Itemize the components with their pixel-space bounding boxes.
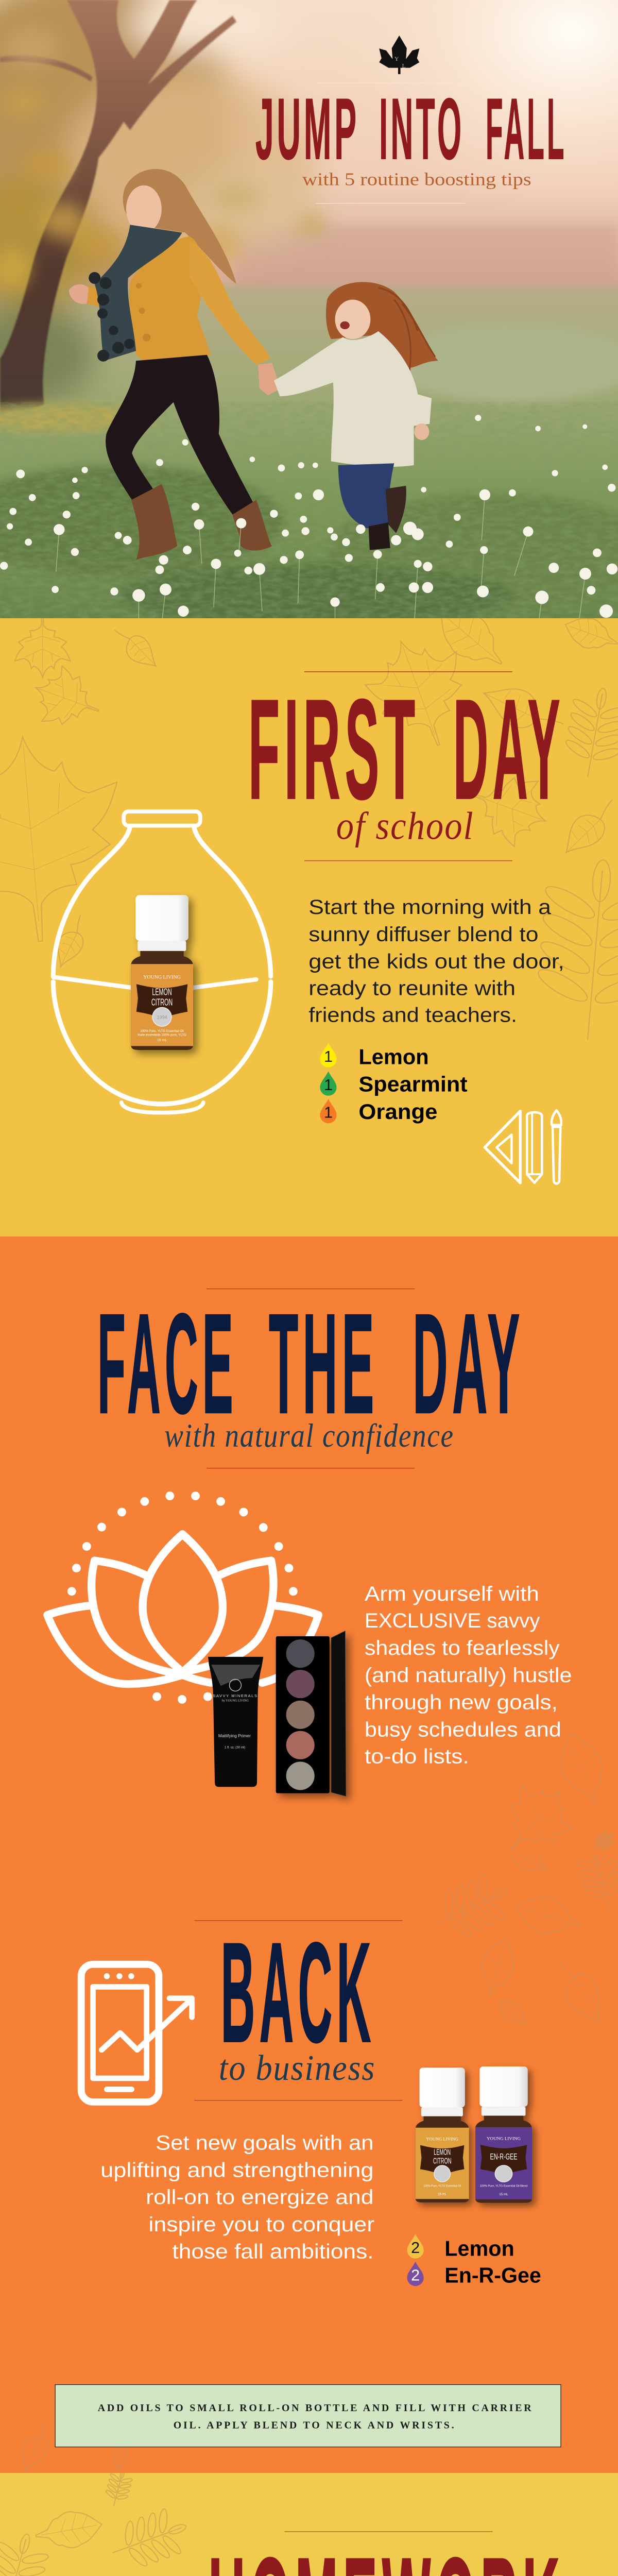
body text: inspire you to conquer <box>149 2213 374 2236</box>
icon: lotus <box>47 1492 318 1704</box>
mother <box>69 169 281 560</box>
body text: Set new goals with an <box>156 2131 374 2154</box>
dandelion stems <box>56 495 585 618</box>
product: lemon bottle: LEMON <box>434 2148 451 2157</box>
icon: diffuser outline <box>53 811 271 1113</box>
oil list: 1 <box>324 1048 333 1065</box>
body text: shades to fearlessly <box>365 1637 560 1659</box>
product: primer tube: 1 fl. oz. (30 ml) <box>225 1745 245 1749</box>
product: en-r-gee bottle: YOUNG LIVING <box>487 2136 521 2141</box>
oil list: Lemon <box>358 1045 429 1069</box>
oil list <box>407 2234 541 2287</box>
oil list: Spearmint <box>358 1072 468 1096</box>
oil list: 1 <box>324 1104 333 1122</box>
leaf pattern background <box>0 2467 194 2576</box>
hero photo: mother and daughter running through a field <box>0 0 618 618</box>
heading: THE <box>269 1284 379 1443</box>
oil list: Orange <box>358 1100 437 1124</box>
body text: to-do lists. <box>365 1745 469 1768</box>
panel: first day of school <box>0 618 618 1236</box>
panel: face the day <box>0 1236 618 1855</box>
leaf pattern background <box>0 596 618 1045</box>
product: lemon bottle: LEMON <box>152 987 172 997</box>
body text: friends and teachers. <box>308 1004 517 1027</box>
body text <box>365 1583 572 1768</box>
tree trunk and branches <box>0 0 236 414</box>
body text: EXCLUSIVE savvy <box>365 1609 540 1632</box>
body text: (and naturally) hustle <box>365 1664 572 1687</box>
sun glow <box>327 0 618 221</box>
product: en-r-gee bottle: EN-R-GEE <box>490 2153 517 2161</box>
product: lemon bottle <box>131 895 193 1050</box>
product: lemon bottle: 15 mL <box>157 1039 167 1042</box>
grass patches <box>0 324 618 627</box>
product: lemon bottle <box>416 2067 469 2202</box>
panel: back to business <box>0 1855 618 2473</box>
product: en-r-gee bottle: 15 mL <box>499 2193 508 2196</box>
grass texture <box>0 402 618 618</box>
product: en-r-gee bottle <box>475 2066 532 2203</box>
body text: sunny diffuser blend to <box>308 923 538 946</box>
oil list: Lemon <box>444 2236 514 2260</box>
product: lemon bottle: YOUNG LIVING <box>426 2136 458 2141</box>
oil list <box>320 1043 468 1124</box>
product: primer tube: by YOUNG LIVING <box>222 1699 249 1702</box>
heading <box>194 1913 402 2101</box>
product: eyeshadow palette <box>276 1631 346 1797</box>
product: lemon bottle: Huile essentielle 100% pure, YLTG <box>138 1033 186 1037</box>
body text: get the kids out the door, <box>308 951 564 973</box>
leaf pattern background <box>487 1726 618 1870</box>
body text: roll-on to energize and <box>146 2186 374 2209</box>
icon: school supplies <box>485 1110 561 1183</box>
body text: through new goals, <box>365 1691 558 1714</box>
callout: roll-on instructions <box>55 2385 561 2447</box>
body text <box>308 896 564 1027</box>
title: jump into fall: JUMP <box>255 80 359 177</box>
icon: maple leaf logo: L <box>402 63 406 70</box>
oil list: 2 <box>411 2239 420 2257</box>
product: primer tube: Mattifying Primer <box>218 1733 251 1738</box>
product: lemon bottle: 100% Pure, YLTG Essential Oil <box>423 2184 461 2188</box>
product: lemon bottle: 1994 <box>157 1015 167 1020</box>
product: lemon bottle: 15 mL <box>438 2193 447 2196</box>
icon: phone with rising chart <box>81 1964 192 2102</box>
panel: homework helper <box>0 2473 618 2576</box>
subheading: with natural confidence <box>164 1417 454 1454</box>
oil list: 2 <box>411 2267 420 2284</box>
subheading: of school <box>336 804 474 848</box>
title: jump into fall <box>255 80 567 204</box>
title: jump into fall: INTO <box>379 80 465 177</box>
tree canopy <box>0 0 323 406</box>
product: lemon bottle: YOUNG LIVING <box>143 974 181 980</box>
callout: roll-on instructions: ADD OILS TO SMALL ROLL-ON BOTTLE AND FILL WITH CARRIER <box>98 2402 531 2414</box>
oil list: 1 <box>324 1076 333 1094</box>
photo background: hazy meadow <box>0 0 618 618</box>
body text <box>100 2131 374 2263</box>
product: primer tube: SAVVY MINERALS <box>213 1693 258 1698</box>
subtitle: with 5 routine boosting tips <box>302 170 531 190</box>
body text: those fall ambitions. <box>172 2241 374 2263</box>
product: lemon bottle: 100% Pure, YLTG Essential Oil <box>140 1029 184 1033</box>
icon: maple leaf logo <box>379 36 419 74</box>
leaf pattern background <box>11 1838 618 2473</box>
misty treeline <box>236 225 618 288</box>
heading: FACE <box>97 1284 237 1443</box>
product: en-r-gee bottle: 100% Pure, YLTG Essential Oil Blend <box>480 2185 527 2188</box>
body text: Arm yourself with <box>365 1583 539 1605</box>
oil list: En-R-Gee <box>444 2263 541 2287</box>
icon: maple leaf logo: Y <box>394 56 399 62</box>
body text: uplifting and strengthening <box>100 2159 374 2181</box>
body text: busy schedules and <box>365 1718 561 1741</box>
daughter <box>274 282 438 550</box>
dandelions <box>0 415 617 618</box>
autumn foliage blots <box>0 28 327 288</box>
body text: Start the morning with a <box>308 896 552 919</box>
body text: ready to reunite with <box>308 977 516 1000</box>
product: primer tube <box>208 1657 263 1787</box>
product: lemon bottle: CITRON <box>433 2157 451 2166</box>
subheading: to business <box>219 2048 375 2088</box>
callout: roll-on instructions: OIL. APPLY BLEND TO NECK AND WRISTS. <box>174 2420 454 2431</box>
product: lemon bottle: CITRON <box>151 997 173 1008</box>
